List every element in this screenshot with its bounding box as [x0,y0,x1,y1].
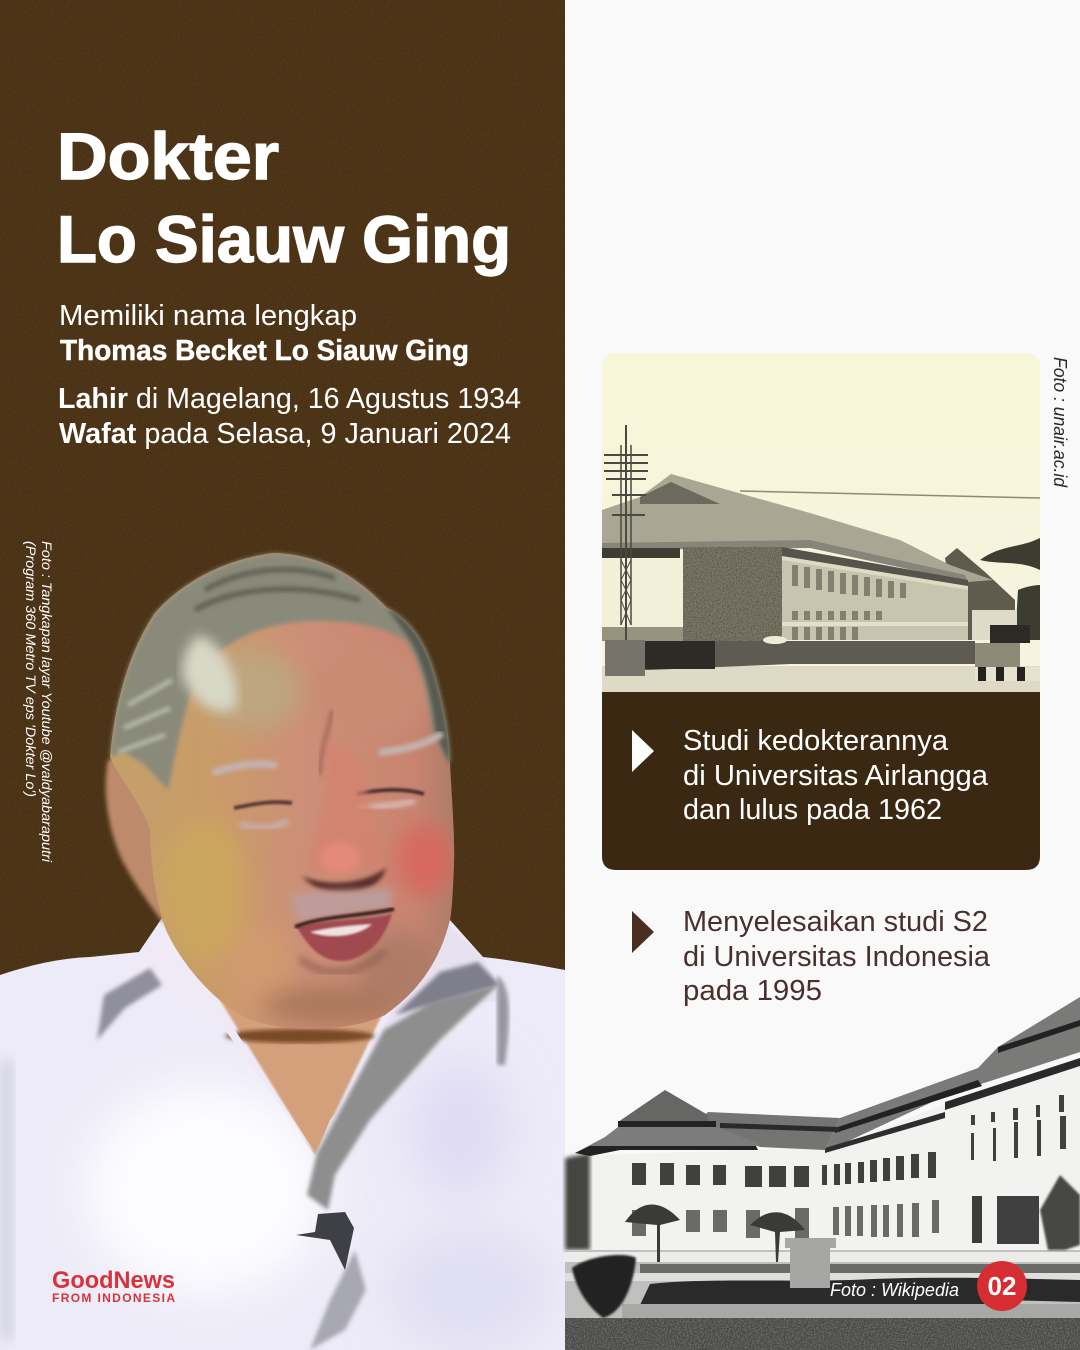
photo credit: Unair: Foto : unair.ac.id [1050,357,1070,488]
monument [785,1238,836,1288]
road sign and barrier [975,625,1040,681]
text: S2 at Universitas Indonesia [683,906,991,1007]
left bush [572,1255,636,1318]
neck [220,1000,389,1155]
ear [106,750,185,925]
tree [980,538,1040,640]
page number badge [977,1261,1027,1311]
text: S2 at Universitas Indonesia: pada 1995 [683,975,822,1007]
nose [290,740,392,922]
stone wall [683,547,782,641]
photo: Universitas Indonesia building [565,997,1080,1350]
left roofs [700,1112,840,1150]
dark band [602,548,680,558]
card text: dan lulus pada 1962 [683,794,942,826]
lower windows [632,1200,939,1240]
card text [683,725,989,826]
power line [740,491,1040,498]
distant building [945,548,1015,640]
card text: di Universitas Airlangga [683,760,989,792]
photo: Airlangga building [602,353,1040,693]
eyebrows [215,735,440,772]
logo: GoodNews from Indonesia: FROM INDONESIA [52,1291,175,1305]
photo credit: portrait: Foto : Tangkapan layar Youtube @valdyabaraputri [39,541,55,863]
low wall [622,1304,1080,1318]
biography text block: Wafat pada Selasa, 9 Januari 2024 [59,418,511,450]
card text: Studi kedokterannya [683,725,949,757]
fence and vehicles [640,641,975,670]
eyes [234,790,424,828]
page number badge: 02 [988,1271,1016,1301]
title [57,119,511,276]
mouth [295,909,394,972]
background: right panel [565,0,1080,1350]
biography text block [58,300,521,450]
title: Dokter [57,119,279,193]
hair [110,553,450,790]
right roofs [825,997,1080,1150]
face skin [110,553,454,1029]
arrow: white triangle [632,730,654,772]
text: S2 at Universitas Indonesia: di Universitas Indonesia [683,941,991,973]
biography text block: Thomas Becket Lo Siauw Ging [60,335,469,367]
upper windows [632,1095,1066,1187]
lattice tower [604,425,648,640]
building body [590,1060,1080,1255]
left collar [100,925,315,1153]
shirt [0,912,565,1350]
panel: brown left background [0,0,565,1350]
eaves [602,540,968,582]
shirt shading [0,1060,550,1350]
young trees [625,1204,805,1262]
right tree [1040,1175,1080,1250]
arrow: dark triangle [632,911,654,953]
portrait of Dokter Lo Siauw Ging [0,540,565,1350]
ground [602,666,1040,693]
logo: GoodNews from Indonesia: GoodNews [52,1267,175,1294]
title: Lo Siauw Ging [57,202,511,276]
text: S2 at Universitas Indonesia: Menyelesaikan studi S2 [683,906,988,938]
button [296,1212,354,1270]
lawn [565,1318,1080,1350]
card: study at Universitas Airlangga [602,692,1040,870]
biography text block: Memiliki nama lengkap [59,300,357,332]
photo credit: portrait [23,541,55,863]
ground [565,1250,1080,1350]
window facade [782,547,968,640]
hedge [640,1278,1080,1305]
photo credit: portrait: (Program 360 Metro TV eps 'Dokter Lo') [23,541,39,797]
sky [602,353,1040,693]
dark left trees [565,1153,590,1250]
right collar shadow and placket [307,985,498,1210]
right collar [317,925,505,1153]
photo credit: Wikipedia: Foto : Wikipedia [830,1280,959,1300]
white sign wall [602,558,683,627]
roof [602,474,993,582]
biography text block: Lahir di Magelang, 16 Agustus 1934 [58,383,521,415]
